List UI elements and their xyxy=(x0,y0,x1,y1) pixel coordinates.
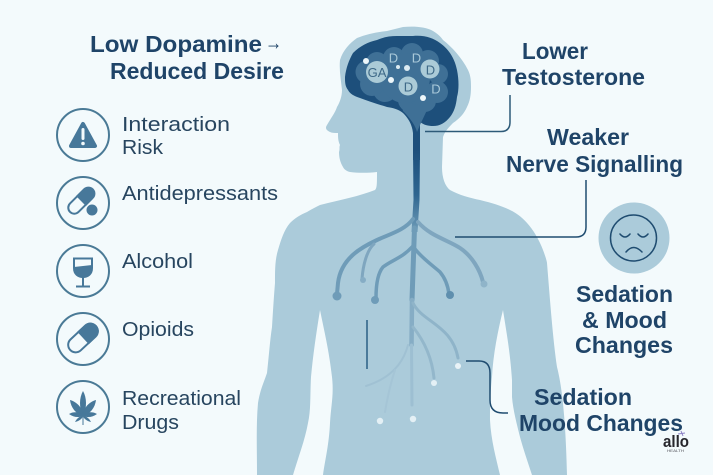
label: sedation mood changes lower xyxy=(519,384,683,436)
title: Low Dopamine xyxy=(90,31,262,57)
neurotransmitter spheres and labels: D xyxy=(412,50,421,66)
item: interaction risk: Interaction xyxy=(122,114,230,136)
title: Reduced Desire xyxy=(110,58,284,84)
neurotransmitter spheres and labels: GA xyxy=(368,65,387,80)
neurotransmitter spheres and labels: D xyxy=(426,62,435,78)
neurotransmitter spheres and labels: D xyxy=(431,82,441,96)
item: alcohol xyxy=(57,245,193,297)
item: recreational drugs xyxy=(57,381,241,434)
neurotransmitter spheres and labels: D xyxy=(404,80,413,94)
label: sedation mood changes lower: Mood Changes xyxy=(519,410,683,436)
logo: allo health: HEALTH xyxy=(667,449,685,453)
label: weaker nerve signalling xyxy=(506,124,683,177)
label: sedation mood changes lower: Sedation xyxy=(534,384,632,410)
leader line: testosterone xyxy=(425,95,510,132)
logo: allo health: allo xyxy=(663,432,689,451)
spinal cord and nerve branches xyxy=(337,150,483,412)
item: antidepressants xyxy=(57,177,278,229)
neurotransmitter spheres and labels xyxy=(363,50,441,101)
human body silhouette xyxy=(257,27,567,475)
label: lower testosterone: Lower xyxy=(522,38,588,64)
vertical marker line xyxy=(366,320,368,369)
leader line: nerve signalling xyxy=(455,180,586,237)
label: weaker nerve signalling: Nerve Signalling xyxy=(506,151,683,177)
icon: sad face xyxy=(598,202,670,274)
item: opioids xyxy=(57,313,194,365)
title: → xyxy=(265,32,282,54)
neurotransmitter spheres and labels: D xyxy=(389,50,398,66)
item: interaction risk xyxy=(57,109,230,161)
leader line: sedation xyxy=(466,361,508,413)
label: sedation and mood changes: Sedation xyxy=(576,281,673,307)
brain xyxy=(345,36,458,160)
item: interaction risk: Risk xyxy=(122,137,164,159)
brain outer dark shape xyxy=(345,36,458,160)
item: opioids: Opioids xyxy=(122,319,194,341)
item: recreational drugs: Drugs xyxy=(122,412,179,434)
label: lower testosterone xyxy=(502,38,645,90)
icon list xyxy=(57,109,278,434)
item: alcohol: Alcohol xyxy=(122,251,193,273)
label: sedation and mood changes: & Mood xyxy=(582,307,667,333)
label: weaker nerve signalling: Weaker xyxy=(547,124,629,150)
brain inner lobes xyxy=(356,43,448,132)
label: sedation and mood changes xyxy=(575,281,673,358)
item: antidepressants: Antidepressants xyxy=(122,183,278,205)
nerve ending dots xyxy=(332,277,488,424)
label: lower testosterone: Testosterone xyxy=(502,64,645,90)
label: sedation and mood changes: Changes xyxy=(575,332,673,358)
title xyxy=(90,31,284,84)
item: recreational drugs: Recreational xyxy=(122,388,241,410)
